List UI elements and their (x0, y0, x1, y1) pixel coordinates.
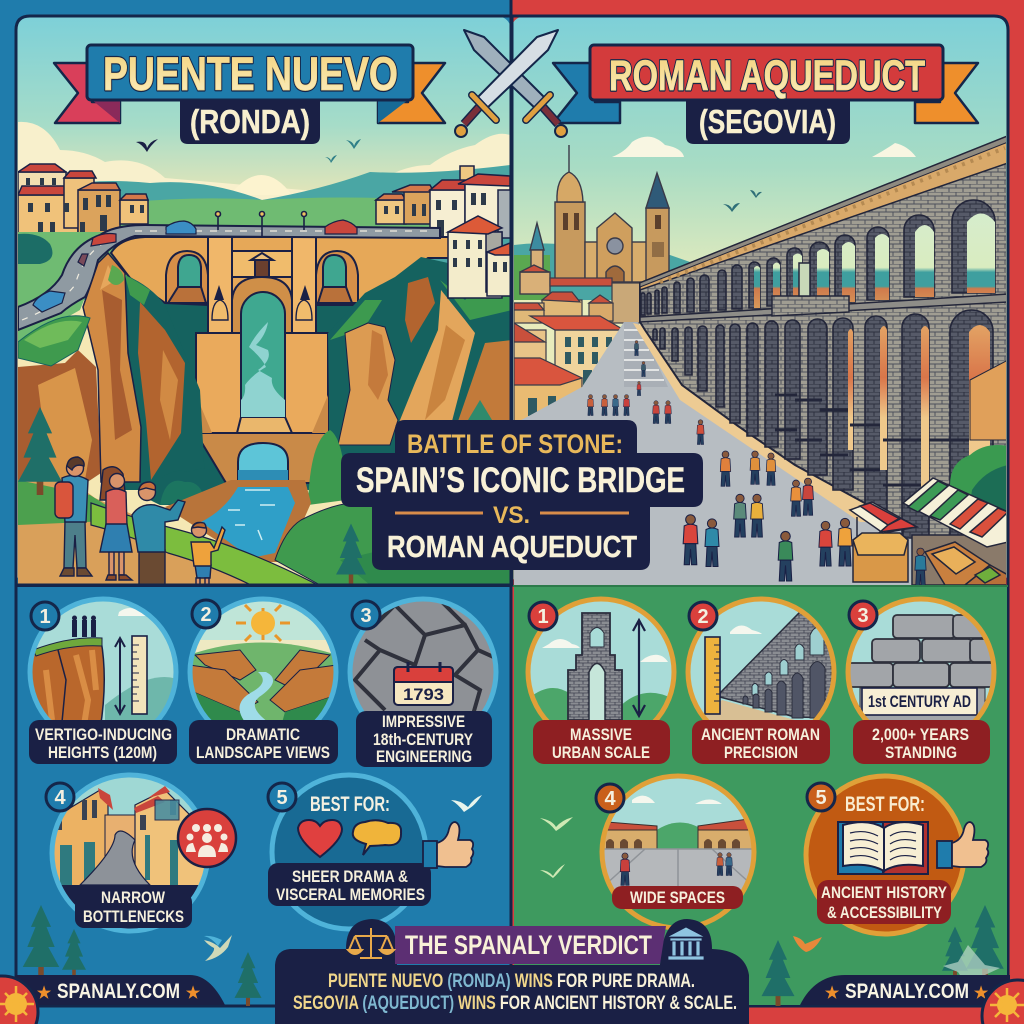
left item 2: landscape views (189, 598, 338, 764)
right white buildings over greens (448, 216, 511, 298)
left item 2: landscape views: LANDSCAPE VIEWS (196, 743, 330, 762)
title block: ROMAN AQUEDUCT (387, 529, 637, 564)
icon: speech bubble (353, 820, 401, 855)
left item 2: landscape views: DRAMATIC (226, 725, 300, 744)
panel: right comparison background (514, 587, 1007, 1005)
left item 1: vertigo heights: 1 (39, 606, 51, 628)
birds (136, 139, 158, 152)
left item 5: best for drama: VISCERAL MEMORIES (276, 885, 425, 904)
right item 5: best for ancient history: & ACCESSIBILITY (827, 903, 943, 922)
panel: Roman Aqueduct scene (511, 16, 1008, 590)
icon: thumbs up (937, 822, 988, 868)
icon: corner sun (982, 980, 1024, 1024)
left item 4: narrow bottlenecks: 4 (54, 787, 66, 809)
lamp posts (216, 212, 306, 238)
right item 3: 2,000+ years standing (845, 598, 998, 764)
people in plaza (587, 340, 926, 586)
upper tier arches (641, 200, 995, 315)
heading: Puente Nuevo banner (54, 45, 445, 144)
decorative trees and birds: right (540, 817, 1004, 1006)
left item 5: best for drama: BEST FOR: (310, 793, 390, 816)
title block: BATTLE OF STONE: (407, 429, 623, 459)
right item 1: massive urban scale: 1 (537, 606, 549, 628)
icon: heart (298, 820, 342, 857)
plaza ground and steps (514, 322, 912, 585)
terrace and wall (514, 278, 641, 422)
left buildings (18, 163, 149, 232)
icon: scales (348, 928, 394, 958)
left item 3: 18th-century engineering: 18th-CENTURY (373, 730, 474, 749)
cars (33, 220, 357, 312)
left item 1: vertigo heights: HEIGHTS (120M) (48, 743, 157, 762)
road (18, 225, 440, 330)
left item 4: narrow bottlenecks: BOTTLENECKS (83, 907, 184, 926)
section frame lines (16, 585, 511, 1024)
left item 3: 18th-century engineering (349, 598, 500, 767)
trees (18, 407, 62, 495)
title block: SPAIN’S ICONIC BRIDGE (356, 461, 685, 500)
tan walkway along aqueduct (633, 323, 866, 522)
left item 1: vertigo heights (29, 598, 180, 764)
market stall small (850, 502, 917, 582)
mid buttress block (772, 296, 849, 316)
background: right red half (511, 0, 1024, 1024)
heading: Puente Nuevo banner: PUENTE NUEVO (103, 47, 398, 100)
branding: right (800, 975, 1024, 1024)
market stall large (903, 478, 1008, 585)
right item 3: 2,000+ years standing: 2,000+ YEARS (872, 725, 969, 744)
left item 3: 18th-century engineering: ENGINEERING (376, 747, 472, 766)
heading: Roman Aqueduct banner (553, 45, 978, 144)
person: child (191, 522, 225, 586)
branding: right: SPANALY.COM (845, 980, 969, 1003)
left gorge cliffs (126, 275, 204, 447)
icon: classical building (667, 927, 705, 960)
branding: right: ★ (974, 985, 989, 1002)
branding: left: ★ (186, 985, 201, 1002)
background: left blue half (0, 0, 511, 1024)
icon: open book (838, 822, 928, 874)
verdict panel (275, 919, 749, 1024)
right item 2: ancient roman precision (687, 598, 840, 764)
right item 4: wide spaces (596, 774, 756, 928)
left green slope (18, 232, 103, 342)
right item 4: wide spaces: 4 (604, 788, 616, 810)
river banks and water (165, 480, 311, 562)
person: man pointing (132, 482, 185, 586)
right item 5: best for ancient history: BEST FOR: (845, 793, 925, 816)
person: woman (100, 467, 132, 580)
panel: Puente Nuevo scene (16, 16, 512, 586)
icon: thumbs up (423, 822, 473, 868)
aqueduct (639, 136, 1006, 539)
right item 2: ancient roman precision: ANCIENT ROMAN (701, 725, 820, 744)
right item 5: best for ancient history (806, 776, 988, 934)
left item 3: 18th-century engineering: 3 (360, 605, 372, 627)
icon: crowd (178, 809, 236, 867)
orange building through last arch (970, 360, 1008, 440)
verdict text: PUENTE NUEVO (RONDA) WINS FOR PURE DRAMA. (328, 971, 695, 992)
right item 5: best for ancient history: 5 (815, 787, 827, 809)
right item 2: ancient roman precision: PRECISION (724, 743, 798, 762)
right item 3: 2,000+ years standing: STANDING (885, 743, 957, 762)
dark bush under bridge (150, 490, 206, 505)
right item 2: ancient roman precision: 2 (697, 606, 709, 628)
right buildings (376, 166, 512, 248)
pier capitals (775, 395, 969, 485)
branding: left: ★ (37, 985, 52, 1002)
left item 5: best for drama: 5 (276, 787, 288, 809)
branding: right: ★ (825, 985, 840, 1002)
left item 1: vertigo heights: VERTIGO-INDUCING (35, 725, 172, 744)
heading: Puente Nuevo banner: (RONDA) (190, 103, 310, 140)
verdict heading: THE SPANALY VERDICT (405, 930, 652, 960)
left item 2: landscape views: 2 (200, 604, 212, 626)
cathedral (520, 145, 669, 294)
left item 3: 18th-century engineering: 1793 (403, 685, 444, 704)
branding: left (0, 975, 225, 1024)
heading: Roman Aqueduct banner: (SEGOVIA) (699, 103, 836, 140)
right item 3: 2,000+ years standing: 3 (857, 605, 869, 627)
verdict text (293, 971, 737, 1014)
decorative trees and birds: left (23, 795, 482, 1006)
left item 5: best for drama: SHEER DRAMA & (292, 867, 408, 886)
right item 5: best for ancient history: ANCIENT HISTORY (821, 883, 948, 902)
left item 4: narrow bottlenecks: NARROW (101, 888, 166, 907)
right item 1: massive urban scale: URBAN SCALE (552, 743, 650, 762)
clouds (612, 137, 916, 157)
panel: left comparison background (18, 587, 510, 977)
hills (84, 165, 510, 300)
bridge deck and upper wall (111, 237, 452, 487)
verdict text: SEGOVIA (AQUEDUCT) WINS FOR ANCIENT HISTORY & SCALE. (293, 993, 737, 1014)
icon: corner sun (0, 976, 38, 1024)
title block: VS. (493, 502, 530, 529)
icon: crossed swords (455, 30, 567, 137)
birds (723, 190, 762, 212)
foreground right hills (274, 504, 372, 584)
tree at right (950, 445, 1006, 495)
heading: Puente Nuevo banner: PUENTE NUEVO (103, 47, 398, 100)
back of gorge (124, 296, 353, 490)
right item 1: massive urban scale (527, 598, 675, 764)
right item 3: 2,000+ years standing: 1st CENTURY AD (868, 692, 971, 711)
title block (341, 420, 703, 570)
lower tier arches (652, 309, 994, 539)
right item 1: massive urban scale: MASSIVE (570, 725, 632, 744)
person: hiker with backpack (55, 457, 92, 576)
distant hills (514, 243, 690, 300)
foreground left ground (18, 480, 246, 584)
left item 5: best for drama (268, 775, 473, 929)
left item 4: narrow bottlenecks (46, 774, 236, 935)
heading: Roman Aqueduct banner: ROMAN AQUEDUCT (609, 52, 925, 100)
branding: left: SPANALY.COM (57, 980, 180, 1003)
right gorge greens and cliffs (328, 257, 510, 453)
clouds (18, 122, 510, 200)
heading: Roman Aqueduct banner: ROMAN AQUEDUCT (609, 52, 925, 100)
right item 4: wide spaces: WIDE SPACES (630, 888, 725, 907)
left item 3: 18th-century engineering: IMPRESSIVE (382, 712, 465, 731)
